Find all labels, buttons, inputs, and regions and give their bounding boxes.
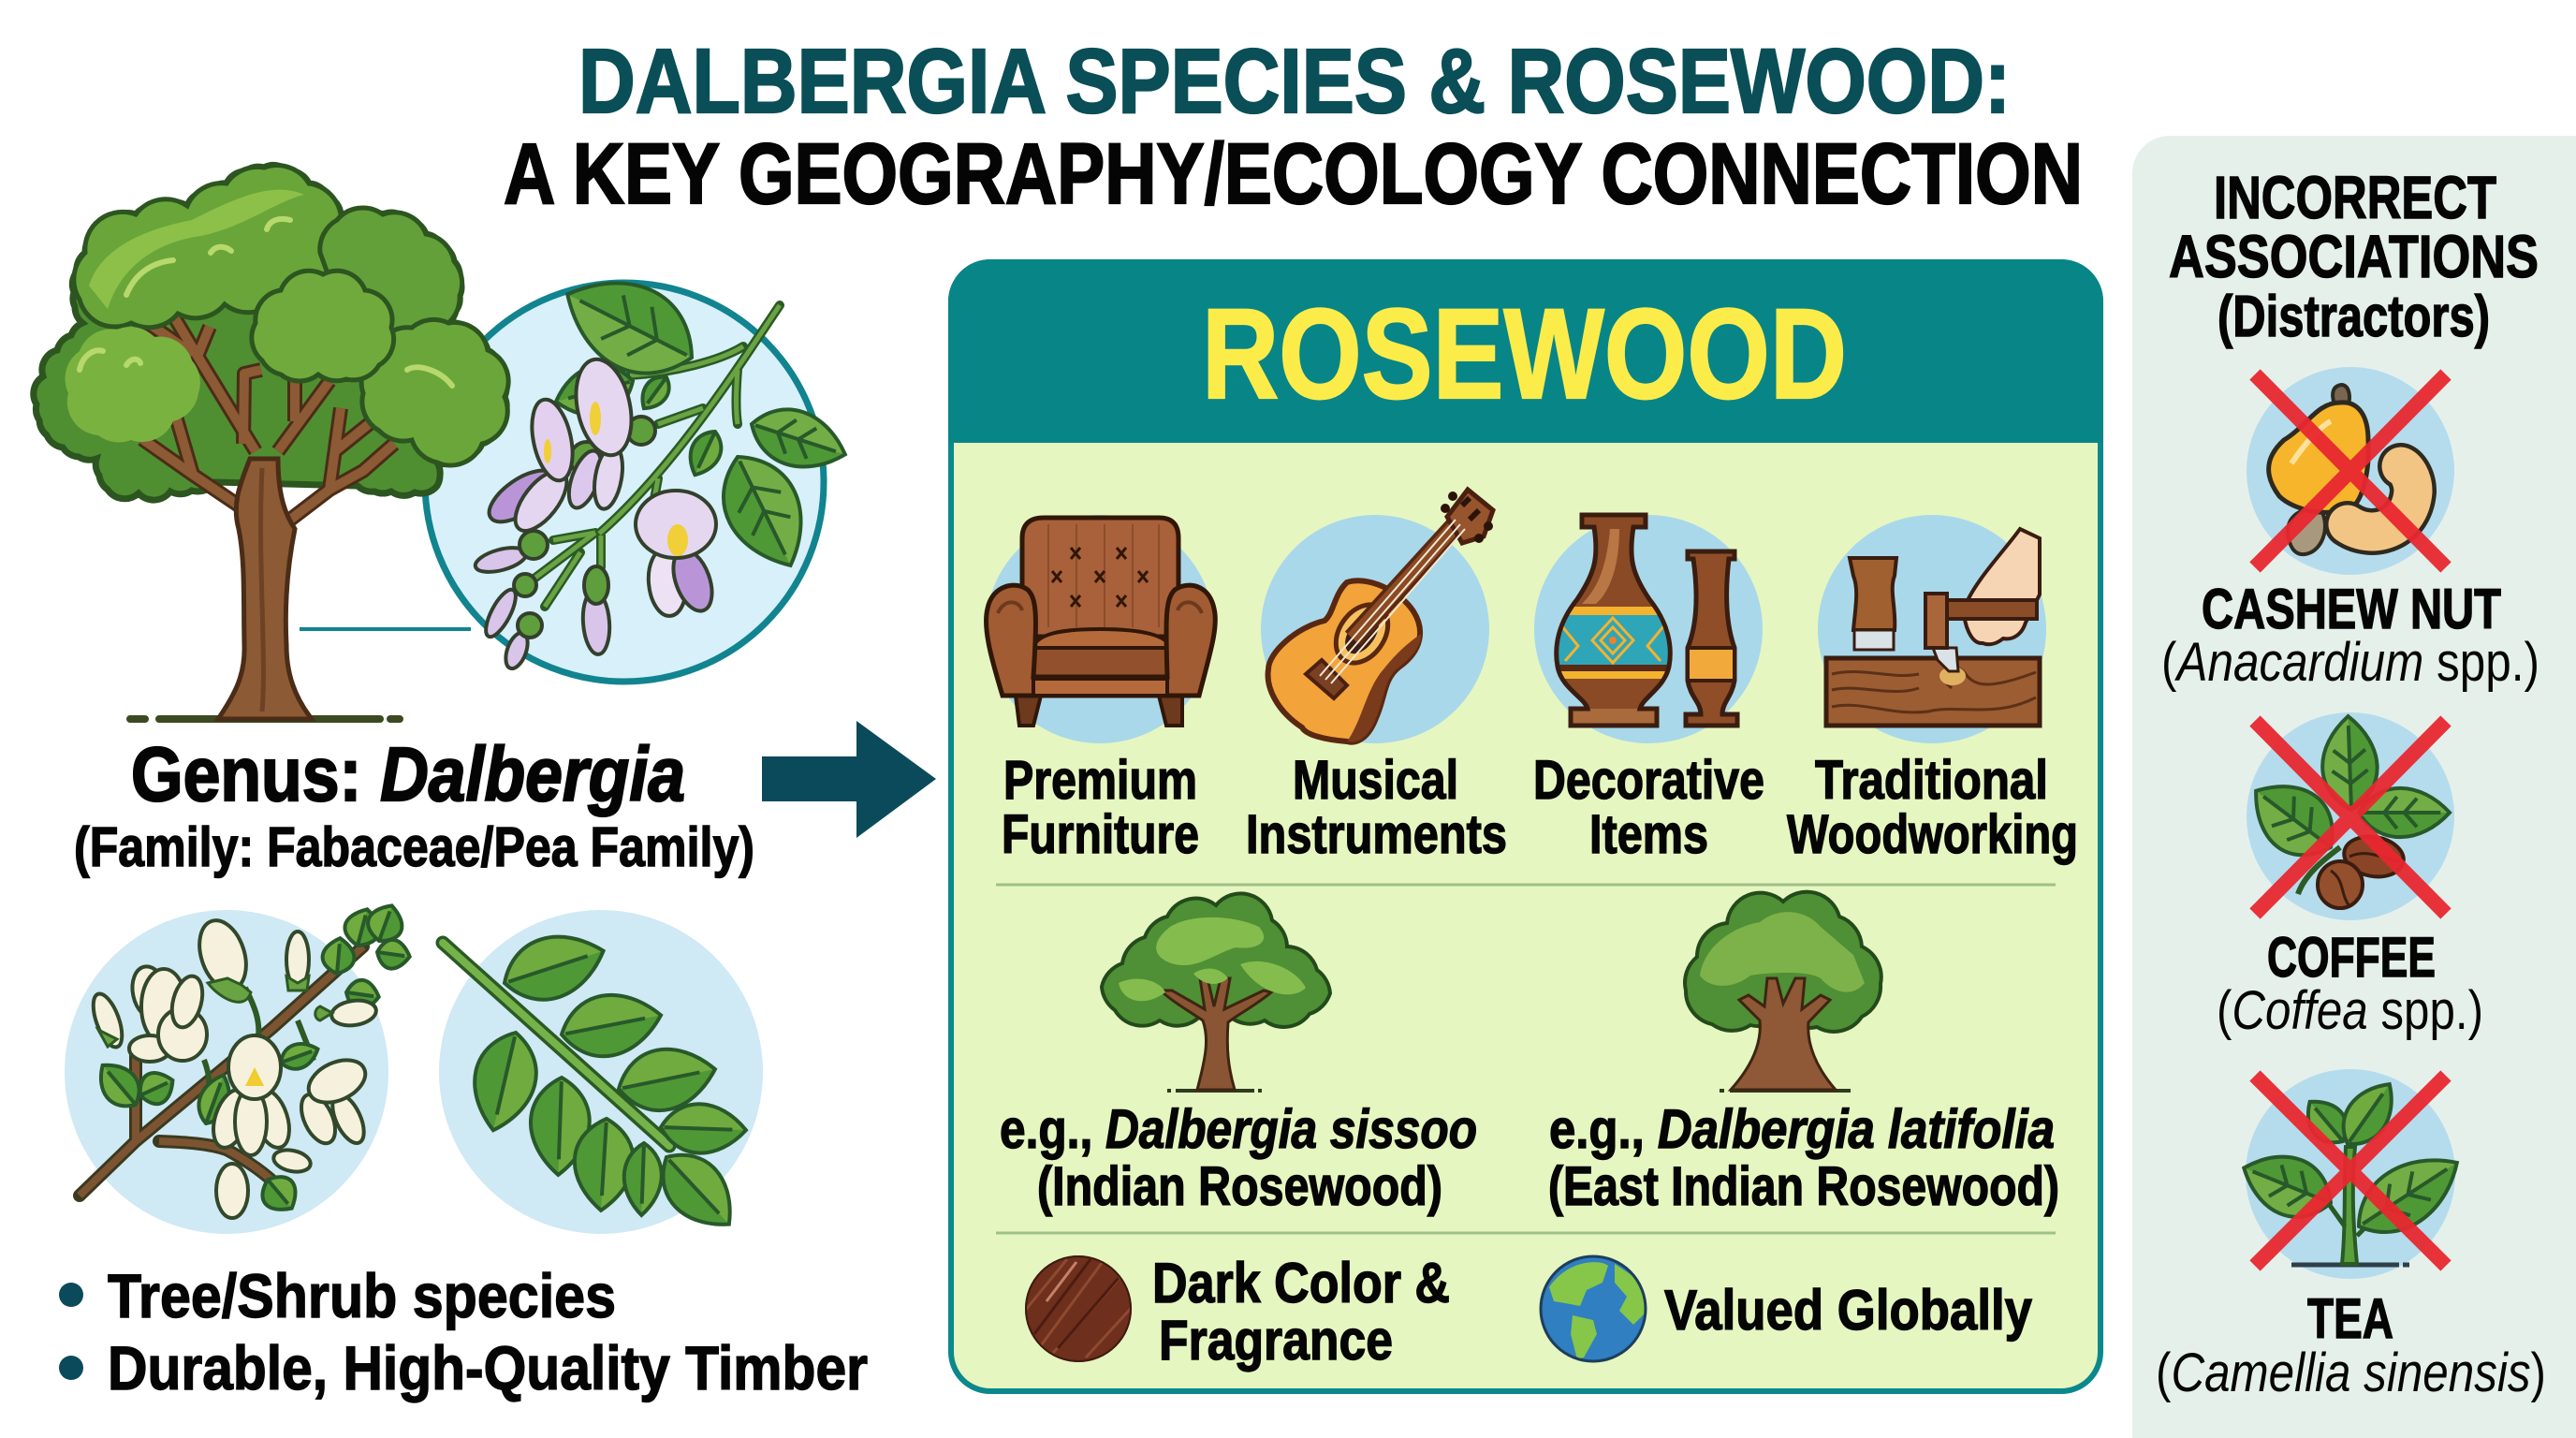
heading: distractors [2169,164,2539,349]
arrow [762,721,936,838]
item: musical instruments [1261,490,1493,743]
heading: distractors: INCORRECT [2214,164,2496,231]
label: latifolia: e.g., Dalbergia latifolia [1549,1099,2055,1160]
panel header: ROSEWOOD [1202,283,1847,426]
label: dark colour and fragrance [1152,1252,1450,1372]
label: traditional woodworking: Traditional [1815,750,2048,811]
label: decorative items [1533,750,1764,865]
title: DALBERGIA SPECIES & ROSEWOOD: [578,30,2011,132]
panel: Dalbergia genus [34,165,868,1402]
icon: large tree [34,165,508,719]
icon: sissoo tree [1102,893,1330,1091]
label: decorative items: Decorative [1533,750,1764,811]
panel header [948,259,2103,443]
list: genus characteristics: Tree/Shrub species [108,1261,616,1330]
heading: genus name: (Family: Fabaceae/Pea Family) [74,816,754,878]
label: sissoo [1000,1099,1477,1217]
label: latifolia: (East Indian Rosewood) [1548,1156,2059,1217]
heading: genus name: Genus: Dalbergia [131,732,685,817]
label: sissoo: (Indian Rosewood) [1037,1156,1442,1217]
list: genus characteristics [59,1261,868,1402]
label: latifolia [1548,1099,2059,1217]
label: valued globally: Valued Globally [1664,1279,2033,1342]
label: cashew nut: CASHEW NUT [2202,578,2501,640]
icon: dark wood sample [1025,1255,1137,1362]
label: musical instruments [1246,750,1507,865]
label: premium furniture: Furniture [1002,804,1199,865]
icon: white flowering branch [65,900,412,1234]
title [504,30,2083,222]
label: dark colour and fragrance: Fragrance [1159,1309,1393,1372]
panel: incorrect associations [2132,136,2576,1438]
item: traditional woodworking [1818,515,2046,743]
label: cashew nut: (Anacardium spp.) [2161,632,2539,693]
label: musical instruments: Instruments [1246,804,1507,865]
icon: coffee crossed out [2237,712,2454,920]
label: premium furniture [1002,750,1199,865]
heading: distractors: (Distractors) [2217,285,2490,349]
icon: tea crossed out [2233,1069,2473,1279]
label: decorative items: Items [1589,804,1708,865]
label: tea [2156,1287,2546,1403]
item: premium furniture [986,515,1215,743]
label: dark colour and fragrance: Dark Color & [1152,1252,1450,1314]
label: cashew nut [2161,578,2539,693]
list: genus characteristics: Durable, High-Quality Timber [108,1333,868,1402]
item: decorative items [1534,510,1763,743]
icon: magnified flowering branch [300,257,854,682]
label: coffee [2217,926,2483,1041]
icon: globe [1541,1256,1647,1361]
label: traditional woodworking [1787,750,2078,865]
label: tea: TEA [2307,1287,2393,1350]
icon: latifolia tree [1685,892,1881,1091]
label: musical instruments: Musical [1293,750,1458,811]
icon: cashew crossed out [2247,367,2454,575]
heading: genus name [74,732,754,878]
icon: compound leaf [439,910,763,1243]
label: sissoo: e.g., Dalbergia sissoo [1000,1099,1477,1160]
panel: rosewood [948,259,2103,1391]
label: premium furniture: Premium [1003,750,1197,811]
label: traditional woodworking: Woodworking [1787,804,2078,865]
label: coffee: COFFEE [2267,926,2436,989]
title: A KEY GEOGRAPHY/ECOLOGY CONNECTION [504,126,2083,222]
label: coffee: (Coffea spp.) [2217,980,2483,1041]
